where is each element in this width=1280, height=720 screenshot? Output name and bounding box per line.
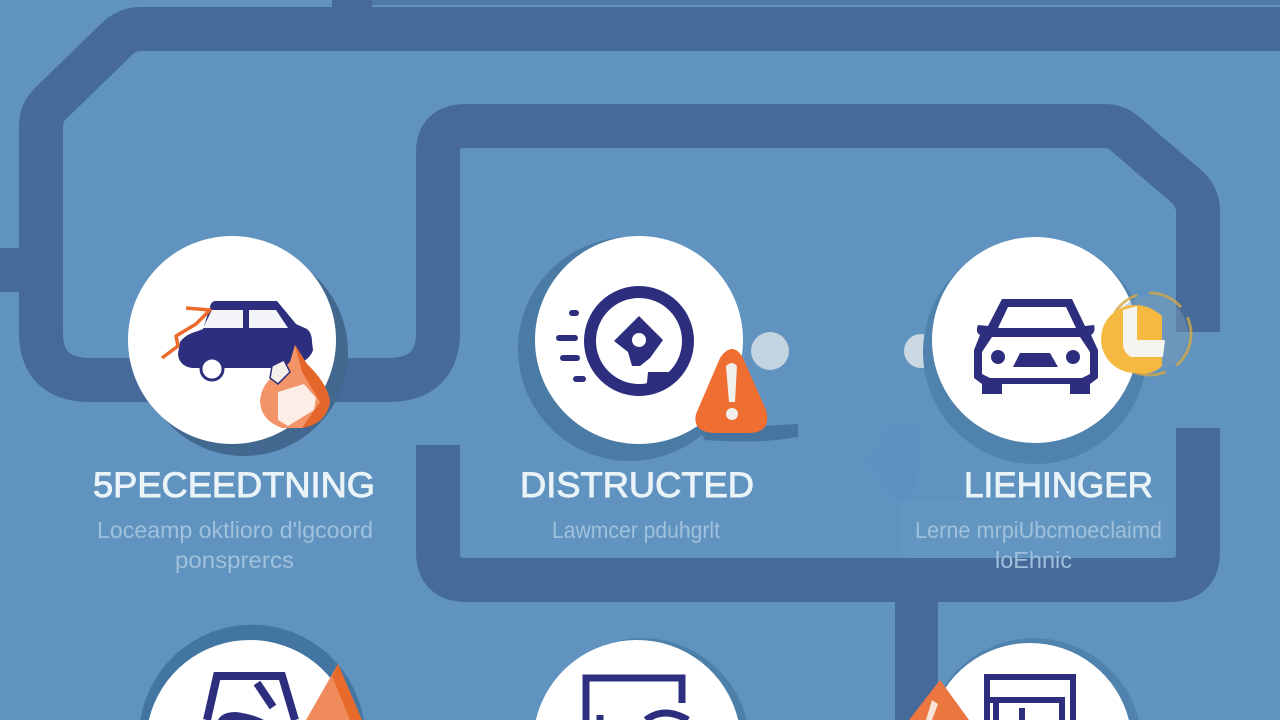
heading: lighter: LIEHINGER	[964, 466, 1153, 505]
white circle	[931, 643, 1129, 720]
circle shadow	[140, 248, 348, 456]
icon: steering wheel	[556, 292, 688, 392]
faint panel behind the third label	[900, 500, 1170, 558]
white circle	[535, 236, 743, 444]
white circle	[149, 640, 351, 720]
white circle	[932, 237, 1138, 443]
icon: panel with wheel	[586, 678, 688, 720]
item 5: bottom middle	[536, 638, 747, 720]
icon: car side view	[178, 301, 313, 380]
icon: windshield wiper	[218, 712, 264, 720]
body: lighter line two: loEhnic	[995, 547, 1072, 573]
icon: triangle highlight	[926, 700, 938, 720]
icon: yellow gauge	[1101, 293, 1191, 375]
icon: car front view	[974, 299, 1098, 394]
circle ring shadow	[923, 240, 1147, 464]
item 4: bottom left	[140, 625, 364, 720]
faint map-like blob	[862, 424, 920, 500]
body: speeding line one: Loceamp oktlioro d'lgcoord	[97, 517, 373, 543]
icon: orange triangle	[909, 680, 969, 720]
connector dot	[904, 334, 938, 368]
labels: row one	[93, 466, 1162, 573]
icon: orange triangle	[306, 664, 362, 720]
item 3: lighter	[904, 237, 1191, 464]
item 2: distracted	[518, 236, 798, 461]
white circle	[128, 236, 336, 444]
body: distracted: Lawmcer pduhgrlt	[552, 517, 721, 543]
arc shadow	[518, 237, 742, 461]
item 6: bottom right	[909, 638, 1139, 720]
icon: windshield	[207, 676, 295, 720]
item 1: speeding	[128, 236, 348, 456]
ring shadow	[929, 638, 1139, 720]
icon: warning triangle	[695, 349, 767, 433]
icon: impact crack	[162, 308, 210, 358]
icon: window frame	[987, 677, 1073, 720]
connector dot	[751, 332, 789, 370]
icon: orange flame with hand	[260, 345, 330, 428]
shadow tail	[700, 424, 798, 441]
ring shadow	[537, 638, 747, 720]
white circle	[536, 640, 738, 720]
body: lighter line one: Lerne mrpiUbcmoeclaimd	[915, 517, 1162, 543]
body: speeding line two: ponsprercs	[175, 547, 294, 573]
heading: distracted: DISTRUCTED	[520, 466, 754, 505]
icon: triangle shaded side	[332, 664, 362, 720]
ring shadow	[140, 625, 364, 720]
heading: speeding: 5PECEEDTNING	[93, 466, 375, 505]
